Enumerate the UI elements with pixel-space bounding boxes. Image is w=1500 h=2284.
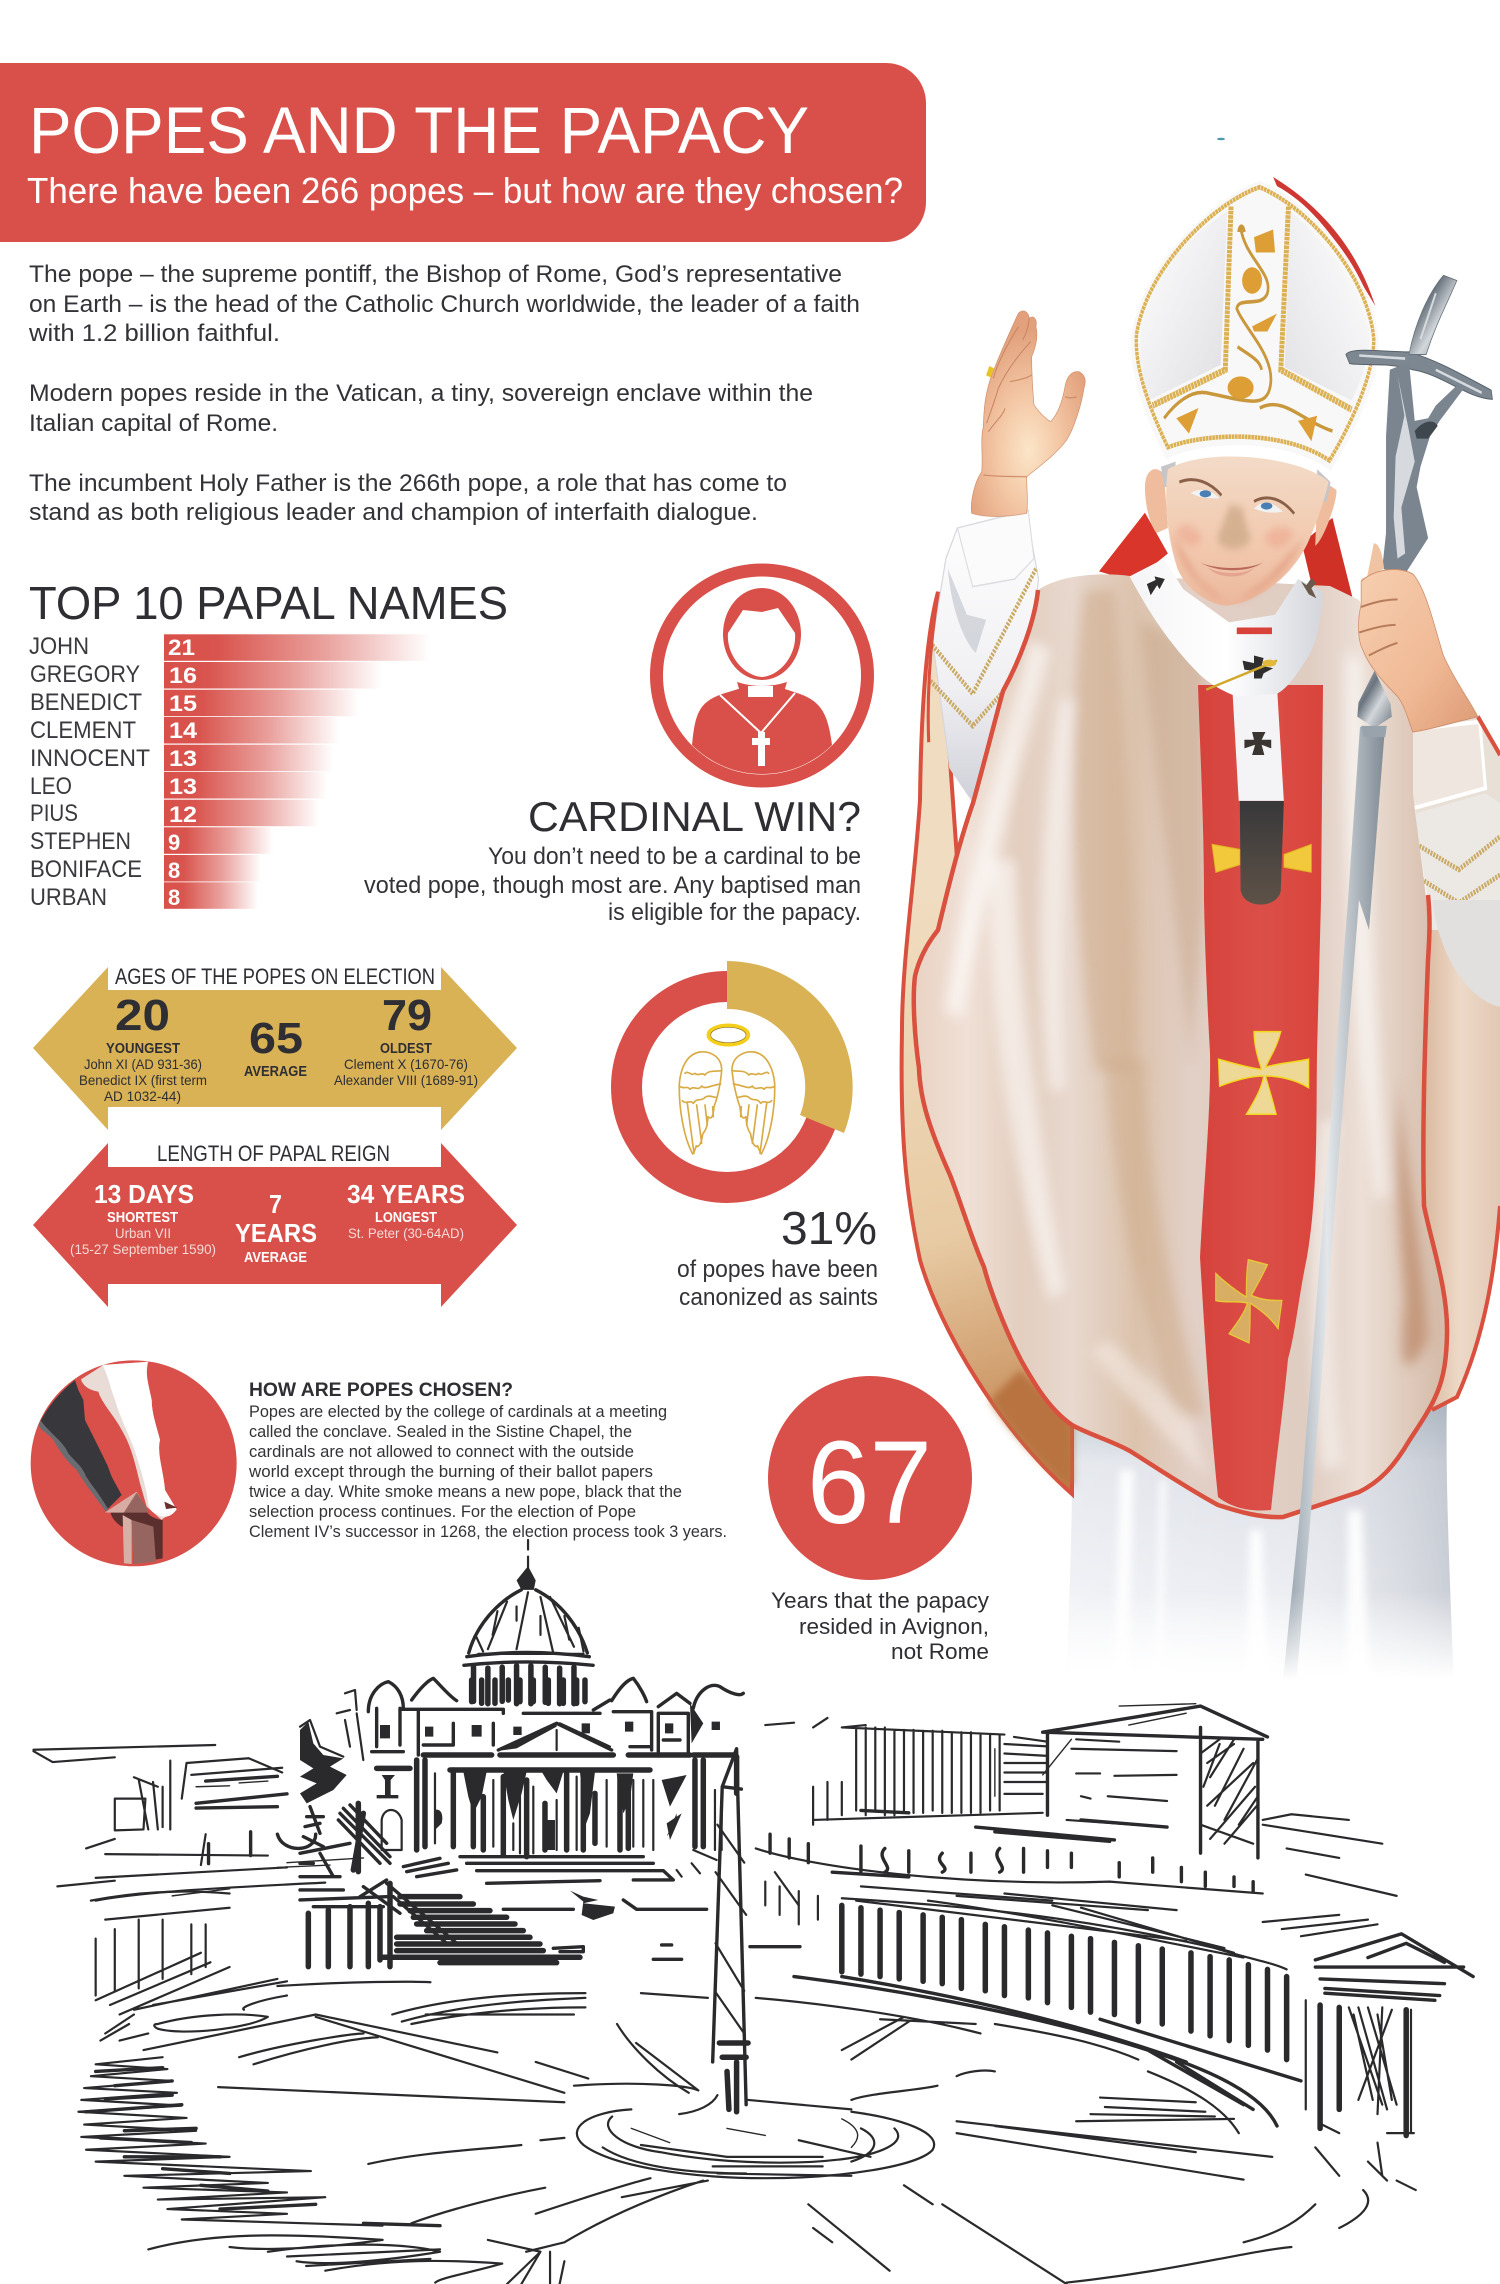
right sleeve [1403, 717, 1500, 930]
sketch: St Peter's Square [33, 1540, 1473, 2284]
names list: STEPHEN [30, 828, 131, 855]
mitre [1131, 177, 1378, 471]
conclave text: world except through the burning of their ballot papers [248, 1462, 653, 1481]
right colonnade [756, 1834, 1378, 2126]
red cape behind neck [1099, 513, 1352, 597]
chasuble front [914, 574, 1447, 1517]
basilica facade [300, 1678, 800, 1967]
red double arrow [33, 1143, 517, 1307]
crucifix [1346, 275, 1492, 574]
average reign: AVERAGE [244, 1250, 307, 1266]
gold crosses [1216, 1032, 1309, 1343]
collar [1130, 559, 1323, 696]
pallium strip [1232, 686, 1284, 801]
ages heading: AGES OF THE POPES ON ELECTION [115, 964, 435, 989]
icon: halo and wings [679, 1025, 775, 1154]
names list: PIUS [30, 800, 78, 827]
staff [1280, 727, 1385, 1710]
cardinal text: You don’t need to be a cardinal to be [488, 843, 861, 870]
heading: how are popes chosen: HOW ARE POPES CHOSEN? [249, 1380, 513, 1401]
names list: BONIFACE [30, 856, 142, 883]
longest: 34 YEARS [347, 1179, 465, 1209]
bar chart: 14 [169, 718, 198, 743]
intro text: on Earth – is the head of the Catholic Church worldwide, the leader of a faith [29, 291, 860, 318]
bar chart: 15 [169, 691, 197, 716]
shortest: (15-27 September 1590) [70, 1241, 216, 1257]
scribbled shadow [78, 2057, 564, 2284]
panel: how are popes chosen [31, 1360, 727, 1566]
conclave text: selection process continues. For the election of Pope [249, 1502, 636, 1521]
red stole [1198, 685, 1323, 1510]
youngest [79, 991, 207, 1104]
saints text: of popes have been [677, 1256, 878, 1283]
left colonnade [91, 1892, 430, 2041]
alb [1065, 1395, 1454, 1700]
conclave text: called the conclave. Sealed in the Sistine Chapel, the [249, 1422, 632, 1441]
staff knob [1357, 671, 1392, 737]
alb bottom fade [1040, 1590, 1480, 1716]
intro text: stand as both religious leader and champion of interfaith dialogue. [29, 499, 758, 526]
intro text: The incumbent Holy Father is the 266th pope, a role that has come to [29, 470, 787, 497]
bar chart [164, 634, 430, 910]
oldest [334, 991, 478, 1088]
panel: cardinal win [364, 793, 861, 926]
panel: top 10 papal names [29, 577, 508, 911]
bar chart: 16 [169, 663, 197, 688]
heading: cardinal win: CARDINAL WIN? [528, 793, 861, 840]
conclave text: cardinals are not allowed to connect with the outside [249, 1442, 634, 1461]
average age: 65 [249, 1014, 303, 1063]
Avignon text: resided in Avignon, [799, 1614, 989, 1639]
heading: top 10: TOP 10 PAPAL NAMES [29, 577, 508, 629]
back lining left [902, 592, 1072, 1494]
average reign: YEARS [235, 1218, 317, 1248]
circle with number [768, 1376, 972, 1580]
oldest: 79 [382, 991, 432, 1040]
intro text: with 1.2 billion faithful. [28, 320, 280, 347]
longest: LONGEST [375, 1210, 437, 1226]
icon: chimney and smoke [31, 1360, 237, 1566]
cardinal text: voted pope, though most are. Any baptised man [364, 872, 861, 899]
header banner [0, 63, 926, 242]
names list: INNOCENT [30, 745, 150, 772]
names list: GREGORY [30, 661, 140, 688]
subtitle: There have been 266 popes – but how are they chosen? [27, 170, 903, 211]
cardinal text [364, 843, 861, 926]
small teal mark [1217, 138, 1225, 140]
youngest: John XI (AD 931-36) [84, 1056, 202, 1072]
bar chart: 9 [168, 830, 180, 855]
Avignon text [771, 1588, 989, 1664]
pallium tail [1240, 801, 1284, 905]
longest: St. Peter (30-64AD) [348, 1225, 464, 1241]
dome [464, 1540, 593, 1704]
youngest: YOUNGEST [106, 1041, 180, 1057]
end pavilion [1306, 1934, 1473, 2135]
panel: length of papal reign [33, 1141, 517, 1307]
right buildings [765, 1704, 1397, 1896]
blessing hand [971, 311, 1085, 516]
gold bow [1212, 844, 1311, 872]
icon: cardinal in circle [650, 564, 874, 788]
back lining right [1420, 900, 1500, 1412]
names list [29, 633, 150, 911]
oldest: OLDEST [380, 1041, 432, 1057]
bar chart: 13 [169, 774, 197, 799]
names list: LEO [30, 773, 72, 800]
youngest: 20 [115, 991, 170, 1040]
saints text: canonized as saints [679, 1284, 878, 1311]
longest [347, 1179, 465, 1241]
panel: ages of the popes [33, 964, 517, 1130]
obelisk [679, 1749, 851, 2114]
conclave text: twice a day. White smoke means a new pope, black that the [249, 1482, 682, 1501]
average age [244, 1014, 307, 1080]
left buildings [33, 1745, 364, 1901]
intro text: Modern popes reside in the Vatican, a tiny, sovereign enclave within the [29, 380, 813, 407]
fountain base [577, 2109, 934, 2178]
Avignon text: Years that the papacy [771, 1588, 989, 1613]
names list: BENEDICT [30, 689, 142, 716]
names list: URBAN [30, 884, 107, 911]
shortest: Urban VII [115, 1225, 171, 1241]
Avignon text: not Rome [891, 1639, 989, 1664]
title: POPES AND THE PAPACY [29, 93, 809, 167]
head [1145, 456, 1336, 606]
oldest: Clement X (1670-76) [344, 1056, 468, 1072]
chasuble red edge [914, 590, 1447, 1517]
panel: 67 years [768, 1376, 989, 1664]
shortest [70, 1179, 216, 1257]
average reign: 7 [269, 1189, 282, 1219]
holding hand [1358, 543, 1478, 732]
conclave text [248, 1402, 727, 1541]
cardinal text: is eligible for the papacy. [608, 899, 861, 926]
circle with number: 67 [807, 1417, 932, 1549]
intro text: The pope – the supreme pontiff, the Bishop of Rome, God’s representative [29, 261, 842, 288]
chasuble folds [945, 590, 1428, 1480]
bar chart: 21 [168, 635, 195, 660]
intro text: Italian capital of Rome. [29, 410, 278, 437]
left sleeve [928, 510, 1039, 804]
reign heading: LENGTH OF PAPAL REIGN [157, 1141, 390, 1166]
stat: 31 percent: 31% [781, 1202, 877, 1254]
shortest: 13 DAYS [94, 1179, 194, 1209]
saints text [677, 1256, 878, 1311]
panel: saints donut chart [626, 961, 878, 1311]
youngest: AD 1032-44) [104, 1088, 181, 1104]
bar chart: 13 [169, 746, 197, 771]
bar chart: 12 [169, 802, 197, 827]
names list: JOHN [29, 633, 89, 660]
names list: CLEMENT [30, 717, 136, 744]
oldest: Alexander VIII (1689-91) [334, 1072, 478, 1088]
conclave text: Clement IV’s successor in 1268, the election process took 3 years. [249, 1522, 727, 1541]
shortest: SHORTEST [107, 1210, 178, 1226]
pope illustration [902, 138, 1500, 1716]
average age: AVERAGE [244, 1064, 307, 1080]
conclave text: Popes are elected by the college of cardinals at a meeting [249, 1402, 667, 1421]
bar chart: 8 [168, 885, 180, 910]
pavement lines [143, 1993, 1416, 2284]
youngest: Benedict IX (first term [79, 1072, 207, 1088]
intro text [28, 261, 860, 526]
bar chart: 8 [168, 858, 180, 883]
pallium and upper body details [1130, 559, 1323, 905]
small black crosses [1147, 576, 1316, 755]
donut chart [626, 961, 853, 1188]
gold double arrow [33, 967, 517, 1130]
average reign [235, 1189, 317, 1266]
